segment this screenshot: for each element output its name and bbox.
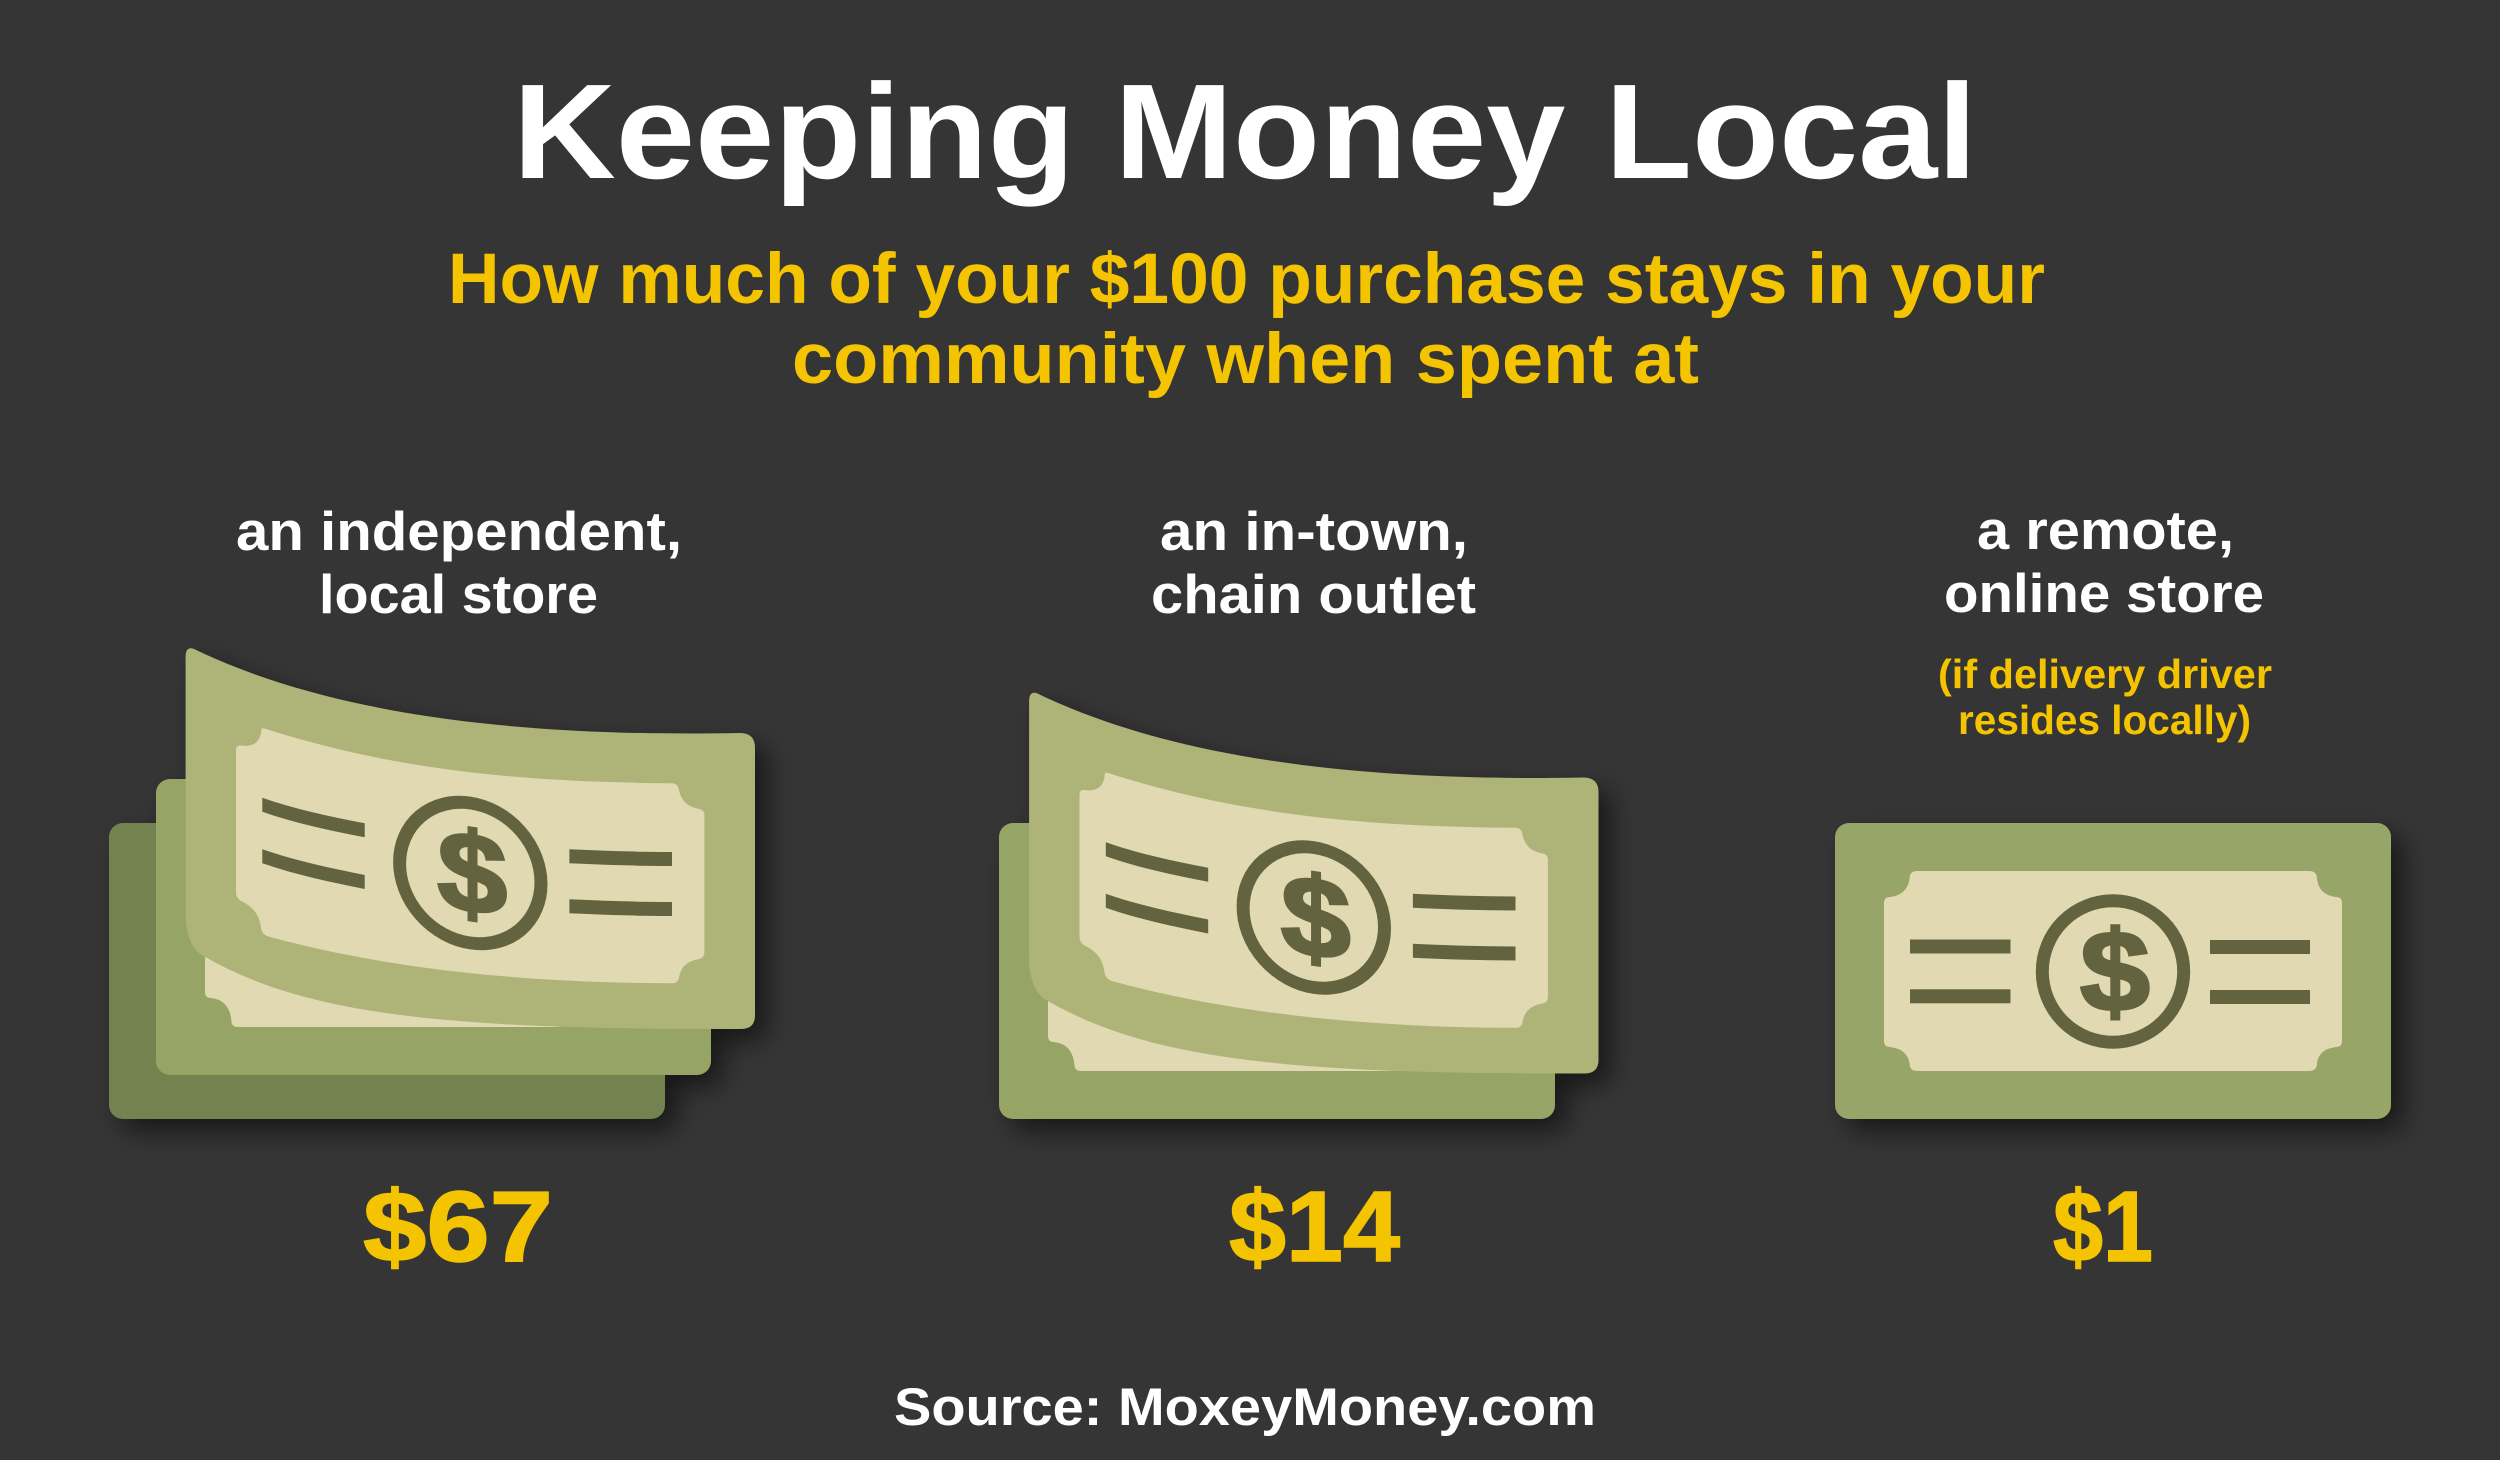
label: independent local store: an independent, (236, 500, 682, 562)
curved front bill (1029, 693, 1598, 1074)
label: in-town chain outlet (1151, 500, 1476, 625)
label: in-town chain outlet: chain outlet (1151, 563, 1476, 625)
subtitle (448, 240, 2045, 399)
bill cream panel (1884, 871, 2342, 1071)
label: remote online store: a remote, (1977, 499, 2234, 561)
value: $67: $67 (363, 1171, 553, 1283)
label: independent local store (236, 500, 682, 625)
value: $1: $1 (2053, 1171, 2153, 1283)
single flat bill (1835, 823, 2391, 1119)
note: delivery driver: (if delivery driver (1938, 651, 2272, 697)
back bill (109, 823, 665, 1119)
label: in-town chain outlet: an in-town, (1160, 500, 1468, 562)
subtitle: How much of your $100 purchase stays in your (448, 240, 2045, 319)
label: independent local store: local store (319, 563, 598, 625)
note: delivery driver: resides locally) (1958, 697, 2251, 743)
curved front bill (186, 648, 755, 1029)
money stack: three bills (109, 648, 755, 1119)
dollar medallion (1243, 837, 1384, 998)
bill lines (1106, 842, 1516, 960)
bill lines (1910, 940, 2310, 1004)
value: $14: $14 (1229, 1171, 1400, 1283)
dollar medallion: $ (437, 805, 507, 941)
source: Source: MoxeyMoney.com (894, 1378, 1596, 1437)
note: delivery driver (1938, 651, 2272, 743)
money stack: two bills (999, 693, 1598, 1119)
dollar medallion (2042, 901, 2184, 1042)
title: Keeping Money Local (513, 56, 1977, 207)
dollar medallion (400, 793, 541, 953)
dollar medallion: $ (1281, 850, 1351, 986)
label: remote online store: online store (1944, 562, 2264, 624)
subtitle: community when spent at (792, 320, 1699, 399)
dollar medallion: $ (2080, 909, 2150, 1035)
bill lines (262, 798, 672, 916)
label: remote online store (1944, 499, 2264, 624)
middle bill (156, 779, 711, 1075)
back bill (999, 823, 1555, 1119)
